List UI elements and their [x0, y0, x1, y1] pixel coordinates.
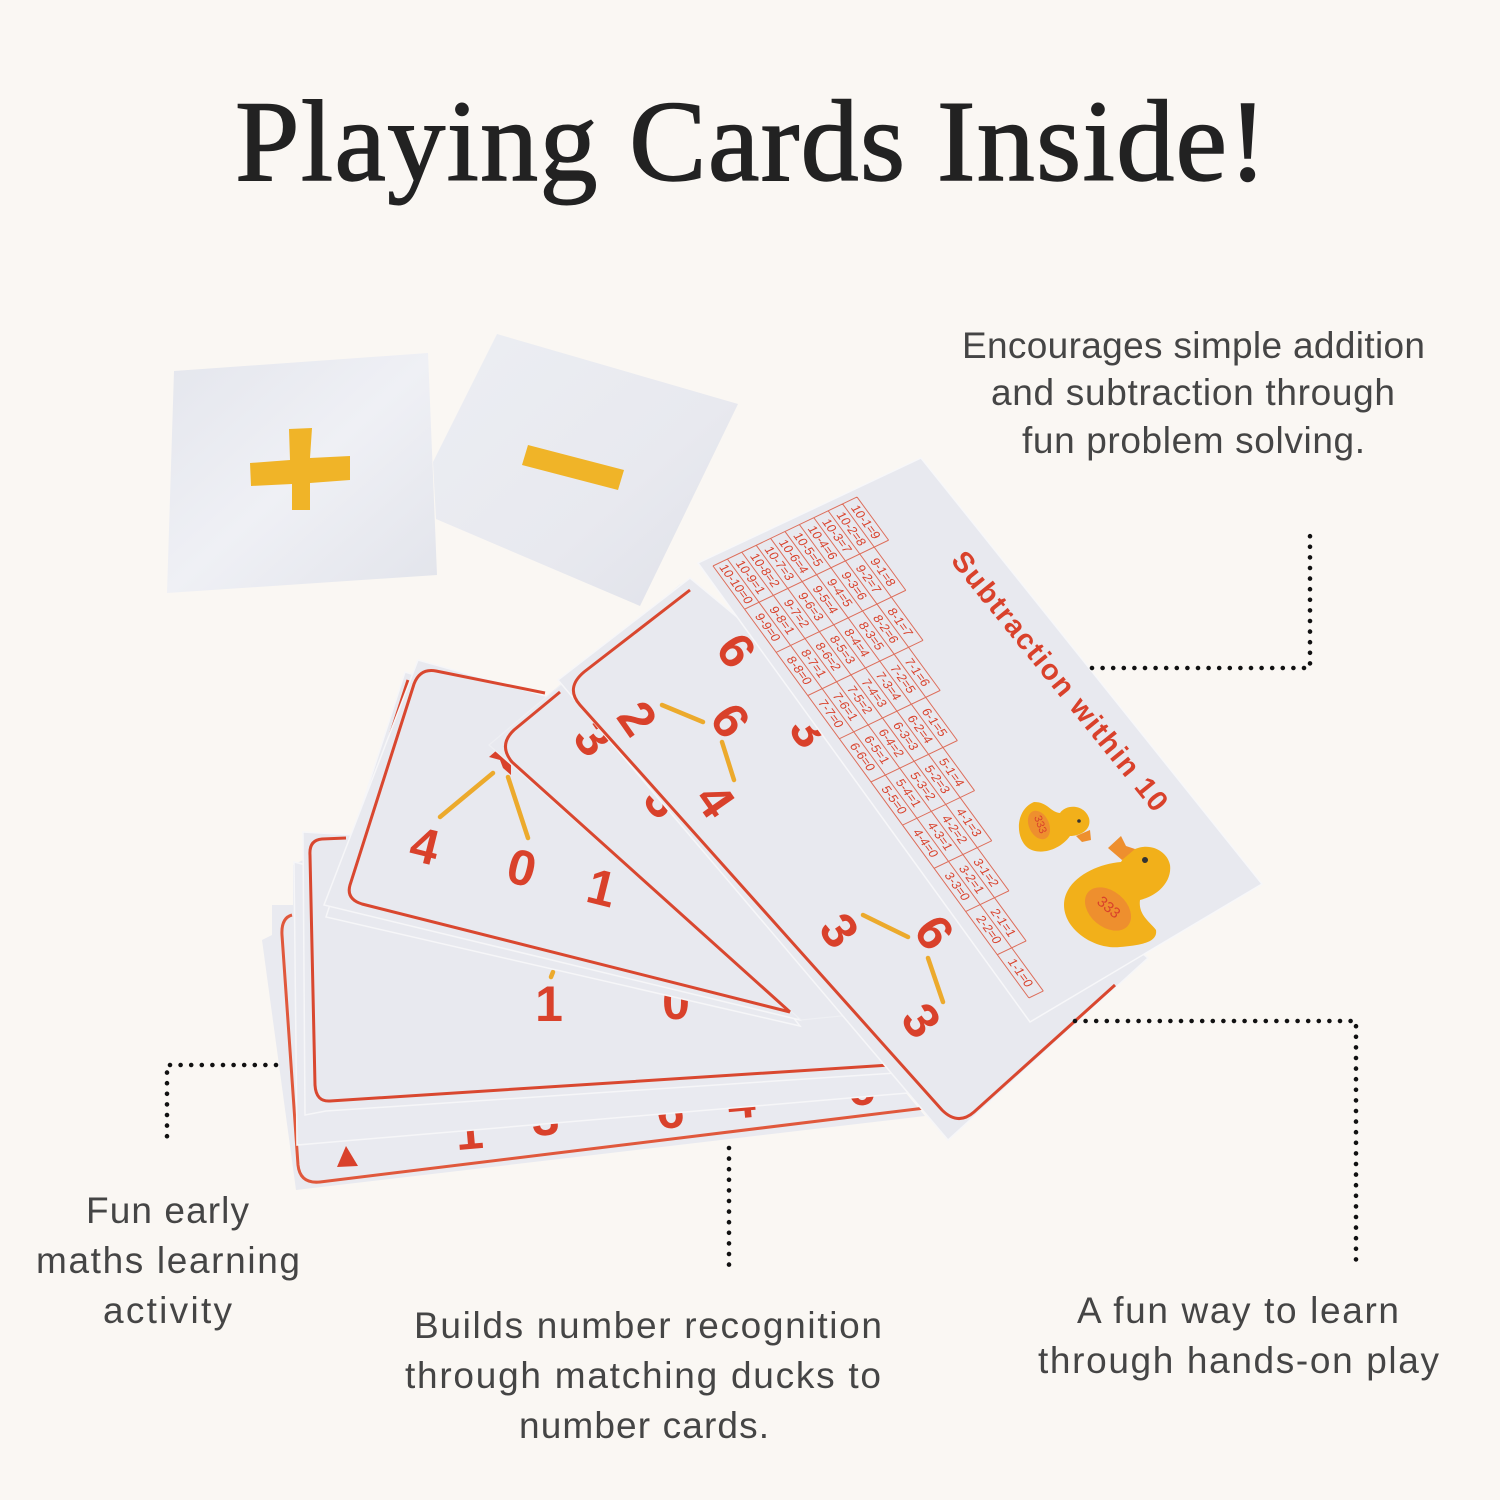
subtraction table: 10-9=1: [732, 558, 768, 596]
subtraction table: 10-2=8: [833, 510, 869, 548]
callout: addition and subtraction: [962, 325, 1425, 668]
card: fan card 4 0 1: 0: [501, 837, 542, 899]
subtraction table: 10-10=0: [716, 562, 756, 606]
plus card: [167, 353, 437, 593]
subtraction table: 7-3=4: [872, 670, 904, 702]
card: fan card 4 0 1: [324, 660, 800, 1020]
subtraction table: 9-7=2: [780, 597, 812, 630]
subtraction table: 3-1=2: [970, 857, 1002, 889]
subtraction table: 4-1=3: [953, 806, 985, 839]
subtraction table: 6-1=5: [918, 706, 950, 739]
icon: small duck: 333: [1031, 814, 1049, 835]
subtraction table: 9-9=0: [752, 611, 783, 643]
subtraction table: 10-4=6: [804, 524, 840, 562]
subtraction table: 2-2=0: [973, 914, 1005, 946]
card stack: bottom card: 6: [654, 1082, 686, 1140]
subtraction table: 10-3=7: [819, 517, 855, 555]
card stack: bottom card: 6: [845, 1059, 877, 1117]
subtraction table: 10-8=2: [747, 551, 783, 589]
subtraction table: 9-3=6: [838, 570, 870, 602]
card: fan card middle: [489, 585, 1000, 1020]
subtraction table: 8-6=2: [812, 641, 844, 673]
card: fan card 2 6 4: [558, 578, 1148, 1140]
subtraction table: 3-2=1: [956, 863, 987, 896]
card: fan card 2 6 4: 3: [778, 703, 840, 758]
callout: addition and subtraction: Encourages simple addition: [962, 325, 1425, 366]
subtraction table: 9-1=8: [867, 556, 899, 588]
subtraction table: 7-5=2: [844, 684, 875, 716]
subtraction table: 4-2=2: [938, 813, 970, 846]
card: fan card 4 0 1: 4: [404, 815, 445, 877]
card stack: bottom card: 3: [529, 1089, 561, 1147]
subtraction table: 9-4=5: [824, 577, 855, 609]
subtraction table: 6-5=1: [861, 734, 893, 766]
subtraction table: 1-1=0: [1004, 957, 1036, 989]
subtraction table: 5-1=4: [936, 756, 967, 789]
callout: number recognition: through matching ducks to: [405, 1355, 881, 1396]
subtraction table: 5-2=3: [921, 763, 953, 796]
subtraction table: 10-1=9: [848, 503, 884, 541]
subtraction table: 2-1=1: [987, 907, 1019, 939]
subtraction table: 7-7=0: [815, 698, 847, 730]
callout: hands-on play: A fun way to learn: [1077, 1290, 1399, 1331]
subtraction table: 8-8=0: [783, 654, 815, 687]
subtraction table: 3-3=0: [941, 870, 973, 903]
card stack: bottom card: 1: [453, 1103, 485, 1161]
subtraction table: 8-5=3: [826, 634, 858, 666]
subtraction table: 9-2=7: [852, 563, 884, 595]
callout: early maths: maths learning: [36, 1240, 300, 1281]
callout: hands-on play: through hands-on play: [1038, 1340, 1440, 1381]
card: fan card 2 6 4: 6: [903, 905, 965, 960]
subtraction table: 9-5=4: [809, 584, 841, 616]
subtraction table: 6-3=3: [890, 720, 921, 752]
card heading: Subtraction within 10: [945, 545, 1174, 818]
icon: big duck: [1064, 836, 1170, 947]
fan of number cards: [262, 578, 1148, 1190]
card: fan card 4 0 1: 1: [581, 857, 622, 919]
subtraction table: 6-2=4: [904, 713, 936, 745]
card: under fan card: [326, 672, 800, 1026]
card: large lower card: 1: [535, 976, 563, 1032]
subtraction table: 8-7=1: [798, 647, 829, 680]
subtraction table: 8-4=4: [841, 627, 873, 659]
callout: number recognition: number cards.: [519, 1405, 769, 1446]
subtraction table: 10-7=3: [761, 544, 797, 582]
card stack: middle card: [294, 862, 920, 1167]
subtraction table: 9-6=3: [795, 590, 827, 623]
subtraction table: 9-8=1: [766, 604, 798, 637]
card: large lower card: 0: [662, 974, 690, 1030]
subtraction table: 7-4=3: [858, 677, 890, 709]
subtraction table: 8-3=5: [855, 620, 887, 652]
card: fan card 2 6 4: 3: [808, 903, 870, 958]
subtraction table: 7-2=5: [887, 663, 919, 695]
card stack: bottom card: 4: [725, 1072, 758, 1130]
callout: hands-on play: [1038, 1021, 1440, 1381]
subtraction table: 8-2=6: [870, 613, 901, 645]
card: fan card 2 6 4: 3: [890, 993, 952, 1048]
subtraction table: 6-4=2: [875, 727, 907, 759]
subtraction table: 4-4=0: [910, 827, 941, 859]
callout: early maths: [36, 1065, 300, 1331]
callout: early maths: activity: [103, 1290, 232, 1331]
subtraction table: 4-3=1: [924, 820, 956, 853]
card: fan card middle: 3: [563, 710, 624, 767]
card stack: bottom card: [262, 835, 925, 1190]
card: fan card 2 6 4: 6: [705, 623, 767, 678]
callout: number recognition: [405, 1148, 882, 1446]
icon: small duck: [1019, 802, 1091, 852]
subtraction table: 6-6=0: [846, 741, 878, 773]
subtraction table: 5-3=2: [907, 770, 939, 802]
subtraction table: 7-6=1: [829, 691, 861, 723]
subtraction table: 7-1=6: [901, 656, 933, 689]
callout: early maths: Fun early: [86, 1190, 250, 1231]
title: Playing Cards Inside!: [235, 78, 1267, 206]
card: fan card 2 6 4: 2: [606, 691, 668, 746]
callout: addition and subtraction: fun problem solving.: [1022, 420, 1365, 461]
callout: addition and subtraction: and subtraction through: [991, 372, 1395, 413]
subtraction table: [713, 497, 1173, 998]
subtraction card: [698, 458, 1262, 1022]
subtraction table: 10-5=5: [790, 531, 826, 569]
card: fan card middle: 3: [633, 772, 694, 829]
subtraction table: 8-1=7: [884, 606, 916, 638]
minus card: [433, 334, 738, 606]
callout: number recognition: Builds number recognition: [414, 1305, 882, 1346]
card: large lower card: [303, 832, 895, 1115]
subtraction table: 10-6=4: [776, 538, 812, 576]
icon: big duck: 333: [1093, 893, 1124, 922]
subtraction table: 5-4=1: [892, 777, 924, 809]
subtraction table: 5-5=0: [878, 784, 910, 816]
card: fan card 2 6 4: 6: [699, 693, 761, 748]
card: fan card 2 6 4: 4: [684, 773, 746, 828]
